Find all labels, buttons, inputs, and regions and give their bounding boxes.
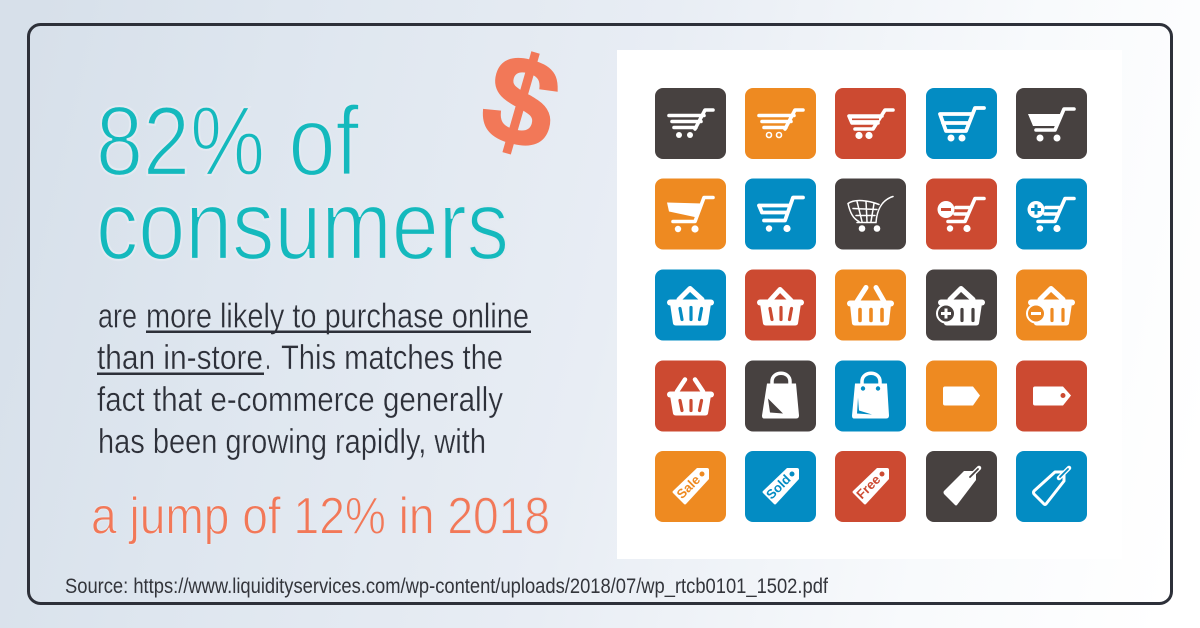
icon: wire cart dark bbox=[835, 178, 906, 250]
text block: body paragraph bbox=[97, 298, 531, 461]
icon: cart blue bbox=[745, 178, 816, 250]
icon: plain tag orange bbox=[926, 360, 997, 432]
text block: body paragraph: fact that e-commerce generally bbox=[97, 381, 503, 419]
text block: body paragraph: This matches the bbox=[281, 339, 503, 377]
icon: cart solid dark bbox=[1016, 88, 1087, 159]
icon: free tag red: Free bbox=[853, 472, 883, 502]
icon: shopping bag dark bbox=[745, 360, 816, 432]
icon: holed tag red bbox=[1016, 360, 1087, 432]
icon: cart red bbox=[835, 88, 906, 159]
heading: 82% of consumers: consumers bbox=[96, 170, 509, 280]
icon: solid tag dark bbox=[926, 451, 997, 522]
text block: body paragraph: has been growing rapidly, with bbox=[98, 423, 486, 461]
icon: basket blue bbox=[655, 270, 726, 340]
icon: free tag red bbox=[835, 451, 906, 522]
icon grid bbox=[655, 88, 1087, 522]
icon: sold tag blue: Sold bbox=[763, 472, 794, 502]
icon: dollar sign: $ bbox=[468, 24, 574, 179]
icon: cart minus red bbox=[926, 178, 997, 250]
icon: shopping bag blue bbox=[835, 360, 906, 432]
heading: 82% of consumers bbox=[96, 86, 509, 280]
heading: 82% of consumers: 82% of bbox=[96, 86, 360, 196]
icon: cart lined orange bbox=[745, 88, 816, 159]
icon: cart plus blue bbox=[1016, 178, 1087, 250]
icon: outline tag blue bbox=[1016, 451, 1087, 522]
icon: basket orange bbox=[835, 270, 906, 340]
icon: sale tag orange bbox=[655, 451, 726, 522]
icon: basket plus dark bbox=[926, 270, 997, 340]
icon: basket minus orange bbox=[1016, 270, 1087, 340]
icon: cart outline blue bbox=[926, 88, 997, 159]
icon: sale tag orange: Sale bbox=[674, 472, 703, 502]
icon: sold tag blue bbox=[745, 451, 816, 522]
source line: Source: https://www.liquidityservices.com/wp-content/uploads/2018/07/wp_rtcb0101_1502.pdf bbox=[65, 575, 828, 598]
panel: white icon panel bbox=[617, 50, 1122, 559]
text block: body paragraph: are bbox=[98, 298, 137, 336]
icon: basket handles red bbox=[655, 360, 726, 432]
icon: cart solid orange bbox=[655, 178, 726, 250]
callout: a jump of 12% in 2018: a jump of 12% in 2018 bbox=[91, 488, 550, 546]
icon: cart lined dark bbox=[655, 88, 726, 159]
text block: body paragraph: more likely to purchase online bbox=[146, 298, 529, 336]
icon: basket red bbox=[745, 270, 816, 340]
text block: body paragraph: . bbox=[265, 339, 271, 377]
text block: body paragraph: than in-store bbox=[97, 339, 263, 377]
